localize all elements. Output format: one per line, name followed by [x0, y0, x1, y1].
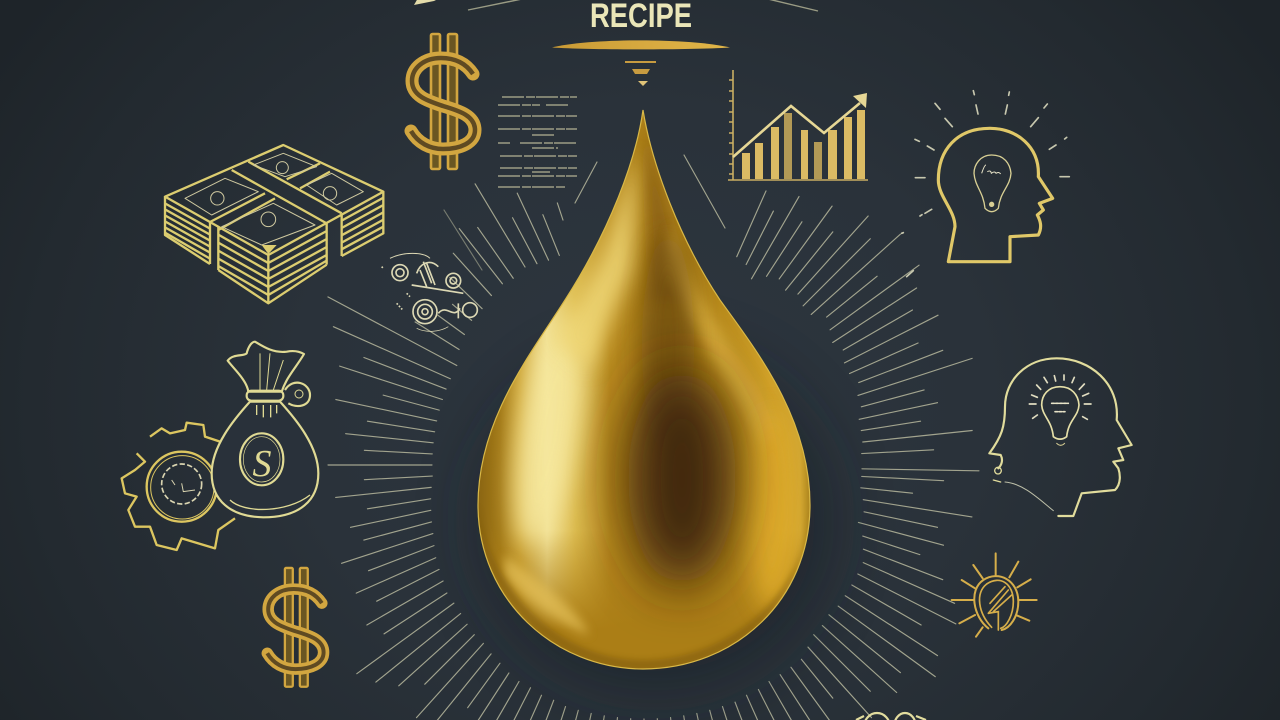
radiating rays around the drop — [328, 155, 979, 720]
bottom gold wash — [510, 538, 798, 664]
right gold glow — [748, 410, 796, 610]
money bag icon — [212, 342, 318, 517]
gear icon — [122, 423, 235, 550]
scribbled ornament — [382, 253, 477, 331]
money stack icon — [165, 145, 383, 303]
text block lines — [498, 97, 577, 187]
rising bar chart with arrow — [728, 70, 868, 180]
cropped icon bottom edge — [856, 713, 926, 720]
dollar sign icon lower — [267, 568, 324, 687]
bottom rim shade — [484, 539, 804, 668]
drop rim — [478, 110, 810, 669]
upper left light band — [555, 150, 638, 370]
title underline — [552, 40, 730, 49]
dark central reflection — [642, 235, 694, 455]
money bag S mark: S — [252, 443, 272, 485]
bottom left streak — [505, 555, 590, 635]
head with lightbulb icon lower — [989, 358, 1132, 516]
infographic canvas — [120, 0, 1133, 720]
dollar sign icon upper — [411, 34, 475, 169]
small funnel ornament — [625, 61, 656, 86]
sunburst bulb icon — [952, 553, 1037, 637]
top decorative lines — [414, 0, 818, 11]
right light band — [664, 231, 770, 433]
tip shade — [642, 147, 674, 288]
head with lightbulb icon upper — [902, 91, 1069, 277]
gold drop — [470, 100, 835, 692]
left broad highlight — [500, 312, 600, 548]
